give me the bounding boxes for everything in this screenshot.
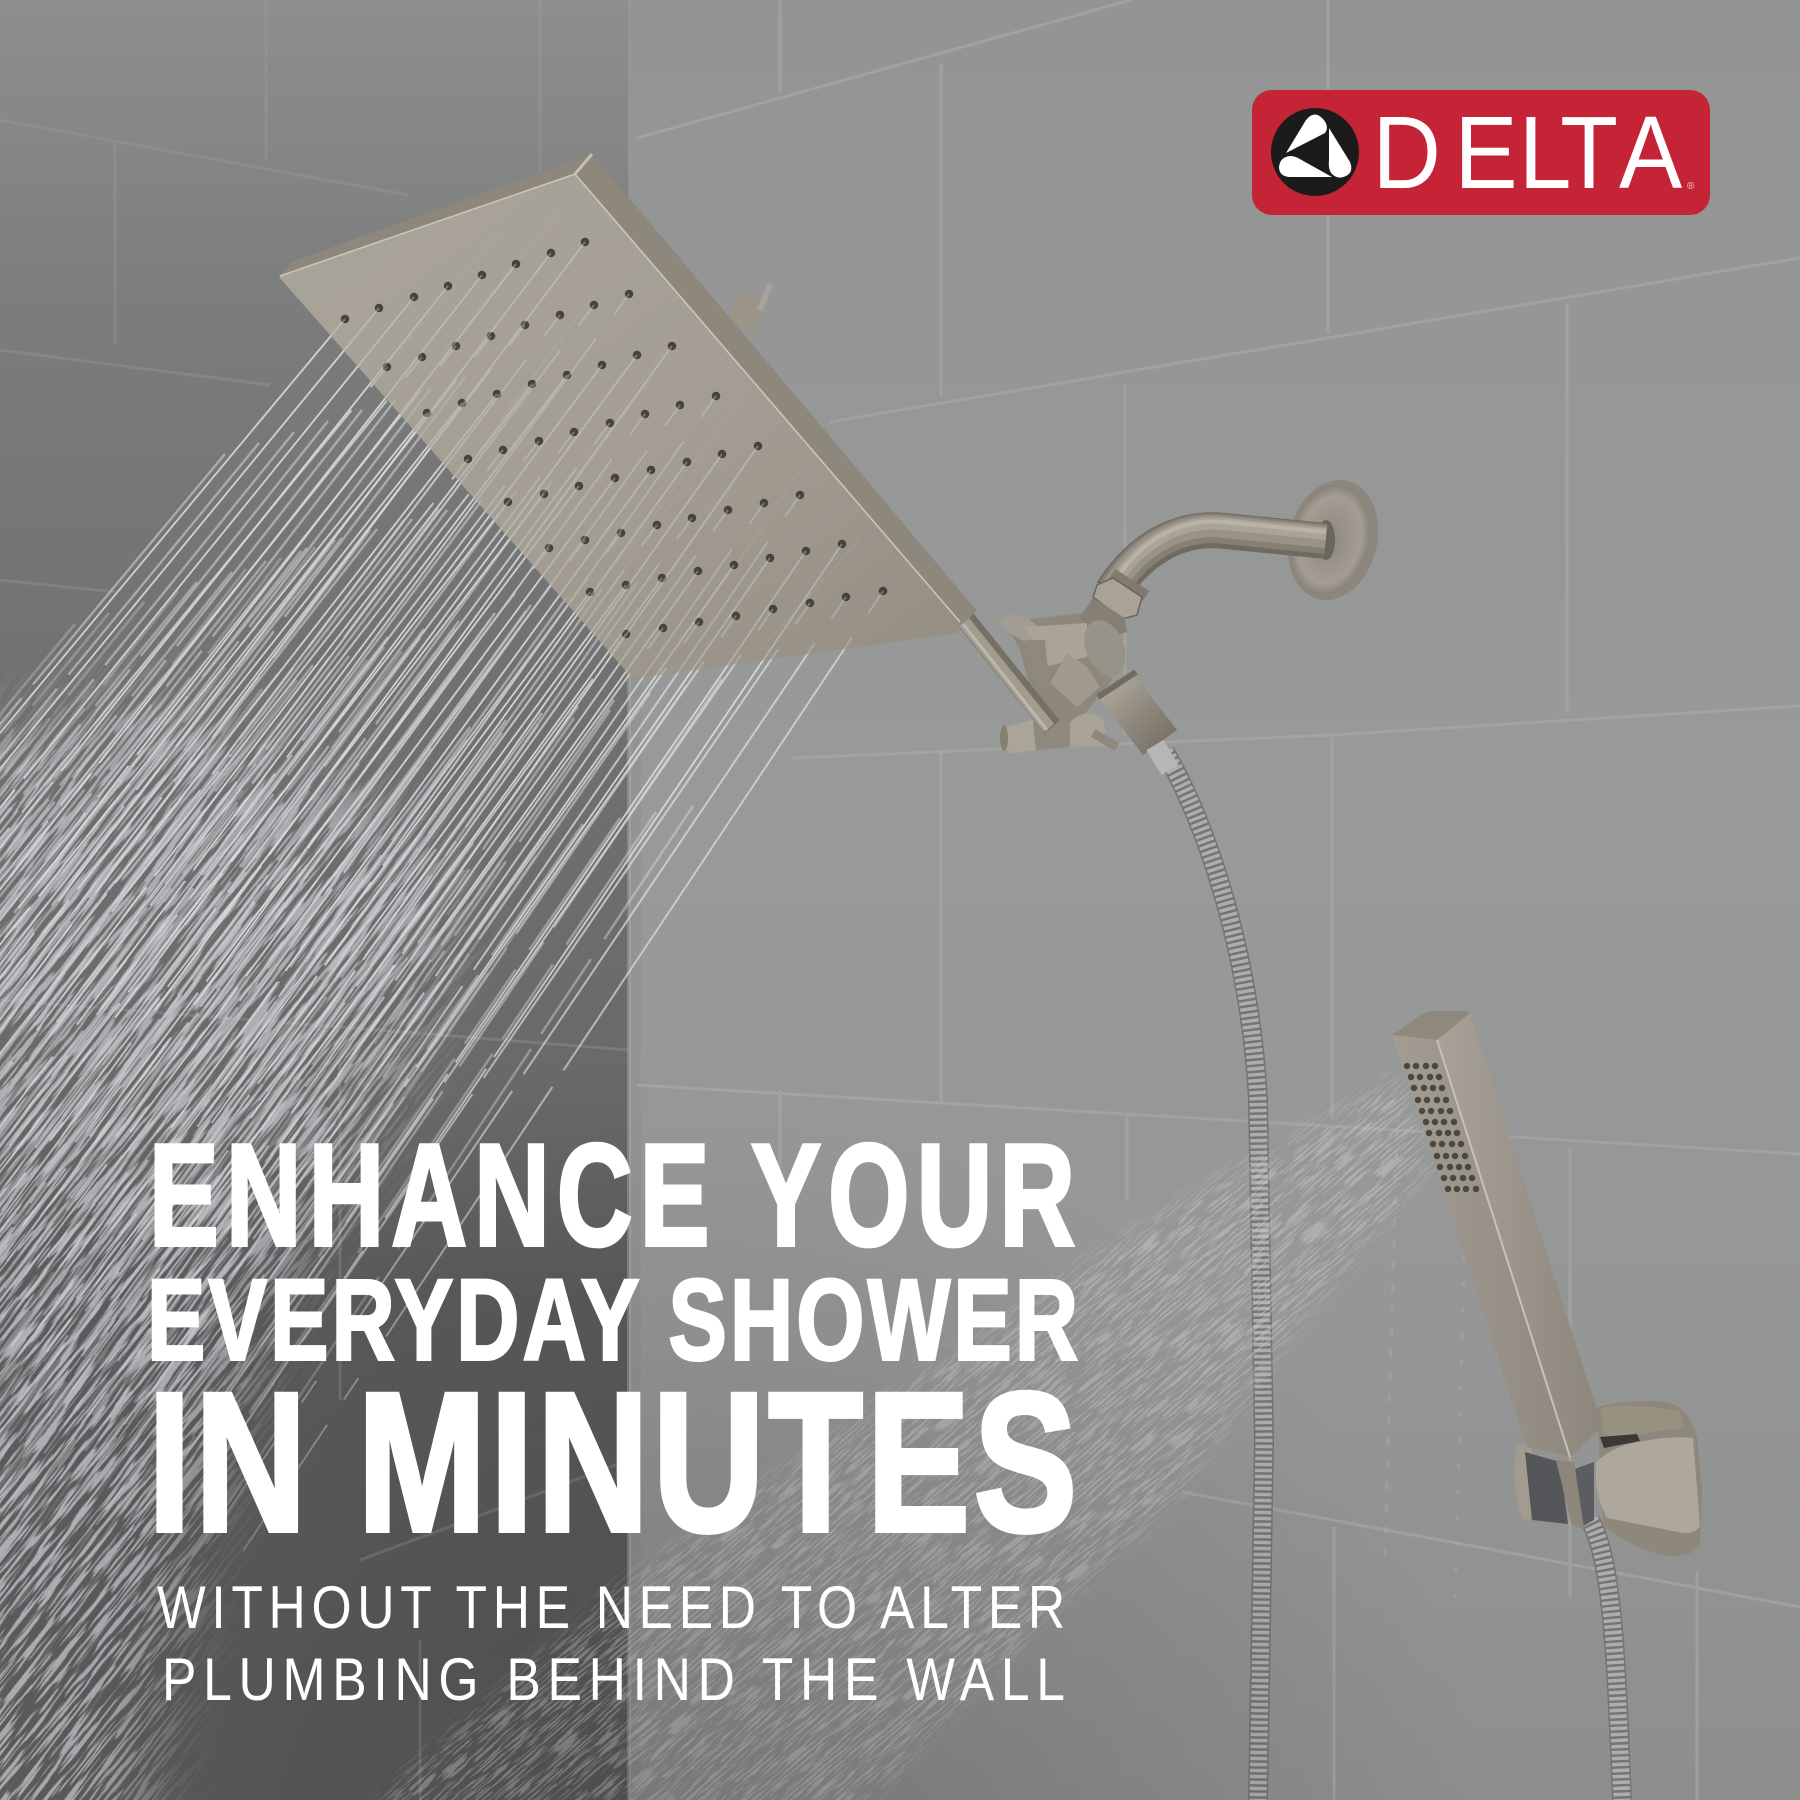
bottom shading [0,1100,1500,1800]
registered mark: ® [1687,181,1695,192]
logo: Delta badge [1252,90,1710,215]
long water streams [0,242,883,1793]
wordmark: DELTA [1372,94,1682,210]
handle top [1392,1011,1471,1040]
left shower wall [0,0,629,1800]
icon: Delta emblem [1271,108,1359,196]
handle face [1392,1035,1570,1457]
curved arm [1112,521,1326,592]
title line 1: ENHANCE YOUR [149,1114,1075,1276]
nut [1093,578,1142,619]
dense far droplets texture [0,662,486,1800]
shower arm and diverter [963,470,1390,770]
title line 3: IN MINUTES [148,1351,1077,1573]
diverter backing [1005,612,1112,724]
water spray from hand shower [374,1078,1431,1800]
diverter block [1050,653,1100,707]
face highlight edge [280,174,960,622]
wall drips [1385,1130,1465,1600]
head stem [963,620,1052,730]
subtitle line 2: PLUMBING BEHIND THE WALL [162,1645,1065,1713]
ball joint and lever [1000,713,1117,754]
subtitle [157,1573,1065,1713]
mounting knob [731,284,770,332]
wall holder [1596,1401,1702,1556]
title [147,1114,1078,1573]
water spray from rain head [0,242,884,1800]
diverter cap [1077,614,1133,682]
wall flange [1276,470,1390,610]
lower hose connector [1098,673,1177,755]
hose: lower to holder [1590,1520,1622,1800]
nozzle holes [345,242,883,634]
brushed face lines [400,210,860,650]
diverter knuckle [998,614,1043,643]
rain shower head [279,154,977,679]
hand shower [1392,1011,1702,1556]
head back edge and side [279,154,977,624]
handle side [1437,1013,1602,1457]
title line 2: EVERYDAY SHOWER [147,1256,1078,1384]
threaded collar [1112,574,1146,596]
grip and rubber bands [1515,1444,1594,1528]
subtitle line 1: WITHOUT THE NEED TO ALTER [157,1573,1065,1641]
hose: main [1165,752,1264,1800]
spray nozzles [1407,1066,1476,1189]
neck [1080,598,1127,640]
